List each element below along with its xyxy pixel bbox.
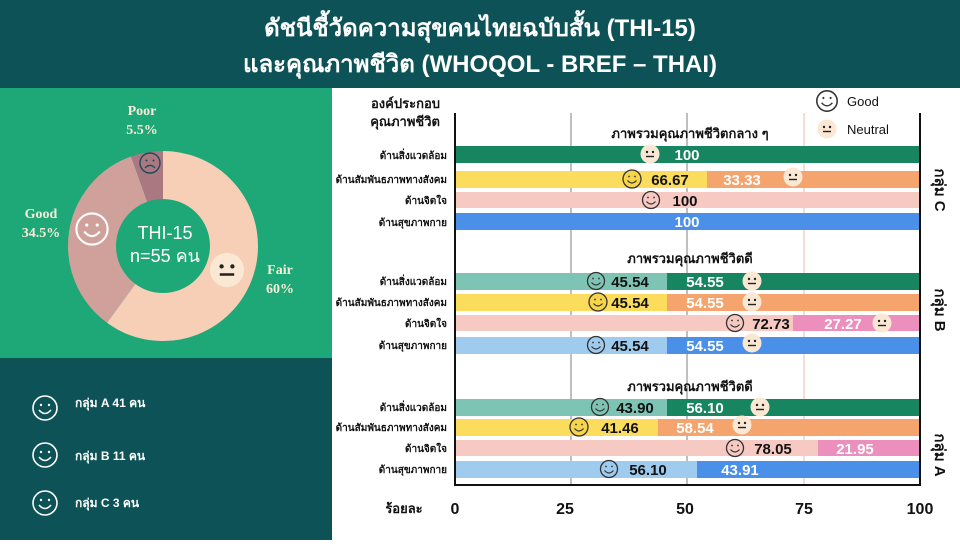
bars group A: 41.46 (601, 420, 639, 437)
section titles: ภาพรวมคุณภาพชีวิตกลาง ๆ (611, 126, 769, 142)
icon: poor (140, 153, 160, 173)
legend: Neutral (847, 122, 889, 137)
group labels: กลุ่ม B (930, 288, 948, 332)
bars group B: 27.27 (824, 316, 862, 333)
section titles: ภาพรวมคุณภาพชีวิตดี (627, 379, 753, 395)
row labels: ด้านจิตใจ (405, 194, 447, 207)
row labels (336, 148, 447, 476)
axes (454, 113, 921, 486)
x axis labels: 0 (451, 501, 460, 518)
row labels: ด้านสิ่งแวดล้อม (380, 148, 447, 162)
row labels: ด้านสัมพันธภาพทางสังคม (336, 422, 447, 434)
row labels: ด้านสุขภาพกาย (379, 340, 447, 352)
donut labels: 34.5% (22, 226, 60, 241)
donut chart (92, 175, 234, 317)
title (243, 9, 717, 80)
axis label header: องค์ประกอบ (371, 96, 440, 111)
bars group C: 33.33 (723, 172, 761, 189)
donut labels: 5.5% (126, 123, 158, 138)
bars group A: 43.91 (721, 462, 759, 479)
bar chart (336, 91, 948, 518)
x axis labels: 75 (795, 501, 813, 518)
bars group B (455, 272, 920, 355)
bars group B: 72.73 (752, 316, 790, 333)
bars group B: 54.55 (686, 274, 724, 291)
row labels: ด้านจิตใจ (405, 442, 447, 455)
bars group B: 45.54 (611, 274, 649, 291)
row labels: ด้านสุขภาพกาย (379, 464, 447, 476)
panel: group legend: กลุ่ม B 11 คน (75, 449, 146, 464)
donut labels: Fair (267, 263, 293, 278)
donut center label: THI-15 (137, 223, 193, 243)
icon: fair (210, 253, 244, 287)
row labels: ด้านสิ่งแวดล้อม (380, 400, 447, 414)
panel: group legend (0, 358, 332, 540)
row labels: ด้านสิ่งแวดล้อม (380, 274, 447, 288)
legend: Good (847, 94, 879, 109)
row labels: ด้านสัมพันธภาพทางสังคม (336, 297, 447, 309)
panel: group legend: กลุ่ม A 41 คน (75, 396, 146, 411)
bars group B: 45.54 (611, 338, 649, 355)
x axis labels: ร้อยละ (385, 501, 423, 516)
bars group A (455, 398, 920, 479)
section titles: ภาพรวมคุณภาพชีวิตดี (627, 251, 753, 267)
title: และคุณภาพชีวิต (WHOQOL - BREF – THAI) (243, 51, 717, 80)
row labels: ด้านจิตใจ (405, 317, 447, 330)
donut center label: n=55 คน (130, 246, 200, 266)
bars group C: 100 (674, 214, 700, 231)
section titles (611, 126, 769, 395)
bars group C: 100 (672, 193, 698, 210)
bars group A: 56.10 (629, 462, 667, 479)
donut labels: Poor (128, 104, 156, 119)
group labels: กลุ่ม C (930, 168, 948, 212)
panel: donut (0, 88, 332, 358)
header bar (0, 0, 960, 88)
bars group C (455, 144, 920, 231)
x axis labels: 100 (907, 501, 933, 518)
row labels: ด้านสัมพันธภาพทางสังคม (336, 174, 447, 186)
bars group A: 21.95 (836, 441, 874, 458)
row labels: ด้านสุขภาพกาย (379, 217, 447, 229)
legend (817, 91, 889, 138)
donut center label (130, 223, 200, 266)
x axis labels: 25 (556, 501, 574, 518)
donut labels: 60% (266, 282, 294, 297)
donut labels: Good (25, 207, 58, 222)
group labels (930, 168, 948, 477)
x axis labels (385, 501, 933, 518)
panel: group legend: กลุ่ม C 3 คน (75, 496, 140, 511)
bars group B: 45.54 (611, 295, 649, 312)
donut labels (22, 104, 294, 297)
bars group A: 56.10 (686, 400, 724, 417)
group labels: กลุ่ม A (930, 433, 948, 477)
icon: good (76, 213, 108, 245)
axis label header: คุณภาพชีวิต (370, 114, 440, 130)
bars group A: 78.05 (754, 441, 792, 458)
bars group A: 43.90 (616, 400, 654, 417)
axis label header (370, 96, 440, 130)
bars group C: 100 (674, 147, 700, 164)
bars group A: 58.54 (676, 420, 714, 437)
bars group B: 54.55 (686, 295, 724, 312)
bars group C: 66.67 (651, 172, 689, 189)
title: ดัชนีชี้วัดความสุขคนไทยฉบับสั้น (THI-15) (264, 9, 696, 44)
bars group B: 54.55 (686, 338, 724, 355)
x axis labels: 50 (676, 501, 694, 518)
